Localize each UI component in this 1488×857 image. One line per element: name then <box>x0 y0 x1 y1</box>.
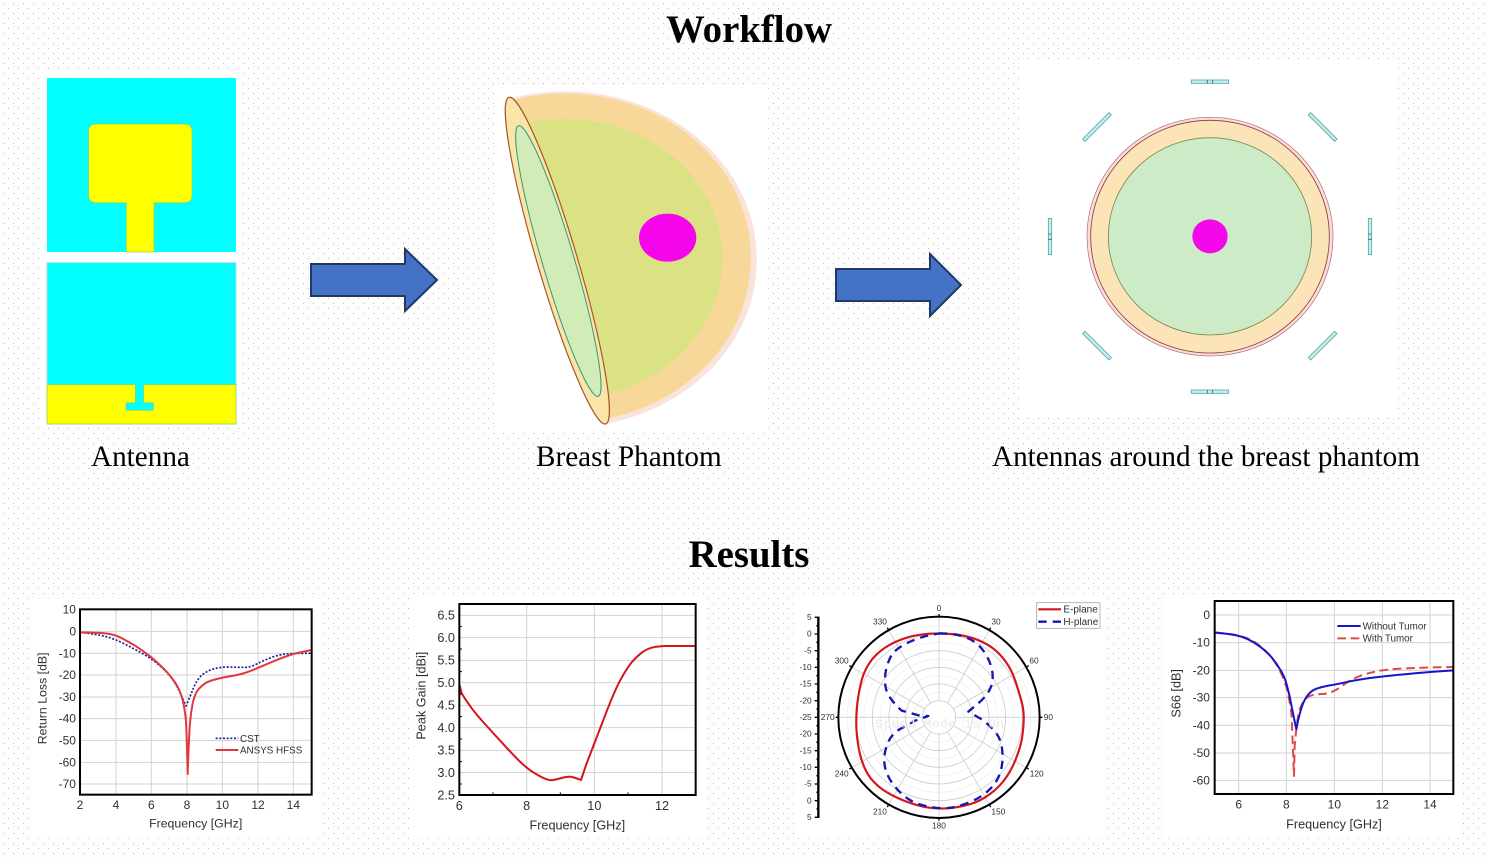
x tick labels: 8 <box>523 799 530 813</box>
x tick labels: 10 <box>587 799 601 813</box>
y tick labels: 0 <box>1203 608 1210 622</box>
x tick labels: 10 <box>216 798 229 812</box>
y tick labels: 6.5 <box>437 609 455 623</box>
legend <box>1337 621 1427 645</box>
fat layer <box>513 94 751 418</box>
legend <box>216 734 303 757</box>
with tumor curve <box>1215 632 1453 776</box>
x tick labels: 10 <box>1328 797 1341 811</box>
x tick labels <box>1235 797 1437 811</box>
chart: return loss <box>30 598 320 838</box>
angle labels: 90 <box>1044 712 1053 722</box>
cut face inner <box>503 121 613 401</box>
without tumor curve <box>1215 633 1453 729</box>
title: Workflow: Workflow <box>666 8 832 51</box>
angle labels: 60 <box>1029 655 1039 665</box>
HFSS curve <box>80 632 312 774</box>
y tick labels: -60 <box>59 755 76 769</box>
x tick labels: 2 <box>77 798 84 812</box>
chart: peak gain <box>410 597 707 838</box>
label: Antenna: Antenna <box>91 441 190 473</box>
y tick labels: 6.0 <box>437 631 455 645</box>
panel: antenna <box>40 73 242 427</box>
gain curve <box>459 646 696 780</box>
y tick labels: -50 <box>1193 746 1210 760</box>
y tick labels: 5.0 <box>437 676 455 690</box>
radial scale: -20 <box>800 695 812 705</box>
y tick labels: 2.5 <box>437 788 455 802</box>
legend: CST <box>240 734 260 745</box>
panel: breast phantom <box>490 85 768 432</box>
chart: S66 <box>1163 595 1462 838</box>
y tick labels: -20 <box>59 668 76 682</box>
angle labels: 30 <box>991 617 1001 627</box>
legend: ANSYS HFSS <box>240 746 303 757</box>
skin ring <box>1087 117 1333 356</box>
gland <box>1108 138 1312 335</box>
y tick labels: -10 <box>59 646 76 660</box>
y tick labels: -20 <box>1193 663 1210 677</box>
angle labels: 270 <box>821 712 835 722</box>
y tick labels: -10 <box>1193 636 1210 650</box>
title: Results: Results <box>689 533 809 576</box>
y tick labels: -40 <box>59 712 76 726</box>
antenna bottom view <box>47 263 236 424</box>
y tick labels: 5.5 <box>437 654 455 668</box>
radial scale: -20 <box>800 729 812 739</box>
legend <box>1037 603 1100 628</box>
radial scale <box>800 612 818 822</box>
watermark: Speed Mode is On <box>876 718 1004 732</box>
polar grid <box>847 626 1031 809</box>
label: Breast Phantom: Breast Phantom <box>536 441 722 473</box>
legend: E-plane <box>1063 604 1098 615</box>
x tick labels: 12 <box>251 798 265 812</box>
angle labels: 240 <box>835 769 849 779</box>
angle labels: 120 <box>1030 769 1044 779</box>
y tick labels: 4.5 <box>437 699 455 713</box>
angle labels: 180 <box>932 821 946 831</box>
y tick labels: -30 <box>59 690 76 704</box>
eight antennas <box>1048 80 1372 393</box>
y tick labels: -30 <box>1193 691 1210 705</box>
y tick labels: -70 <box>59 777 76 791</box>
label: Antennas around the breast phantom: Antennas around the breast phantom <box>992 441 1420 473</box>
chart: peak gain: Peak Gain [dBi] <box>415 652 429 740</box>
x tick labels: 8 <box>184 798 191 812</box>
angle labels <box>821 603 1053 831</box>
y tick labels: 4.0 <box>437 721 455 735</box>
y tick labels: -50 <box>59 733 76 747</box>
radial scale: 0 <box>807 629 812 639</box>
x tick labels: 6 <box>148 798 155 812</box>
y tick labels: 3.0 <box>437 766 455 780</box>
CST curve <box>80 632 312 706</box>
y tick labels: 3.5 <box>437 744 455 758</box>
chart: peak gain: Frequency [GHz] <box>529 818 625 832</box>
chart: radiation pattern <box>795 597 1105 838</box>
x tick labels <box>77 798 300 812</box>
y tick labels <box>437 609 455 802</box>
angle labels: 300 <box>835 655 849 665</box>
H-plane curve <box>884 633 1003 808</box>
y tick labels: -40 <box>1193 718 1210 732</box>
radial scale: -10 <box>800 662 812 672</box>
x tick labels: 8 <box>1283 797 1290 811</box>
legend: With Tumor <box>1363 634 1414 645</box>
radial scale: -15 <box>800 679 812 689</box>
y tick labels <box>1193 608 1210 787</box>
angle labels: 210 <box>873 807 887 817</box>
x tick labels: 6 <box>1235 797 1242 811</box>
fat ring <box>1091 120 1329 353</box>
tumor <box>1192 219 1228 253</box>
arrow: phantom to antennas <box>836 254 961 316</box>
glandular layer <box>528 119 722 393</box>
x tick labels: 12 <box>655 799 669 813</box>
cut face rim <box>490 92 625 430</box>
radial scale: 5 <box>807 612 812 622</box>
panel: antennas around the phantom <box>1020 60 1397 417</box>
y tick labels: 10 <box>63 602 76 616</box>
radial scale: -25 <box>800 712 812 722</box>
y tick labels: 0 <box>69 624 76 638</box>
y tick labels: -60 <box>1193 773 1210 787</box>
angle labels: 0 <box>937 603 942 613</box>
radial scale: 0 <box>807 795 812 805</box>
legend: Without Tumor <box>1363 621 1427 632</box>
radial scale: -10 <box>800 762 812 772</box>
x tick labels: 14 <box>1423 797 1437 811</box>
chart: return loss: Return Loss [dB] <box>35 652 49 744</box>
chart: S66: Frequency [GHz] <box>1286 817 1382 831</box>
angle labels: 330 <box>873 617 887 627</box>
legend: H-plane <box>1063 617 1099 628</box>
radial scale: -5 <box>804 645 812 655</box>
x tick labels: 4 <box>113 798 120 812</box>
x tick labels <box>456 799 669 813</box>
radial scale: -15 <box>800 745 812 755</box>
outer skin layer <box>510 91 757 423</box>
chart: S66: S66 [dB] <box>1169 669 1183 718</box>
chart: return loss: Frequency [GHz] <box>149 817 242 831</box>
x tick labels: 12 <box>1376 797 1389 811</box>
radial scale: -5 <box>804 779 812 789</box>
radial scale: 5 <box>807 812 812 822</box>
x tick labels: 6 <box>456 799 463 813</box>
arrow: antenna to phantom <box>311 249 437 311</box>
y tick labels <box>59 602 76 791</box>
tumor <box>639 214 696 262</box>
E-plane curve <box>856 634 1024 809</box>
x tick labels: 14 <box>287 798 300 812</box>
antenna top view <box>47 78 236 252</box>
angle labels: 150 <box>991 807 1006 817</box>
